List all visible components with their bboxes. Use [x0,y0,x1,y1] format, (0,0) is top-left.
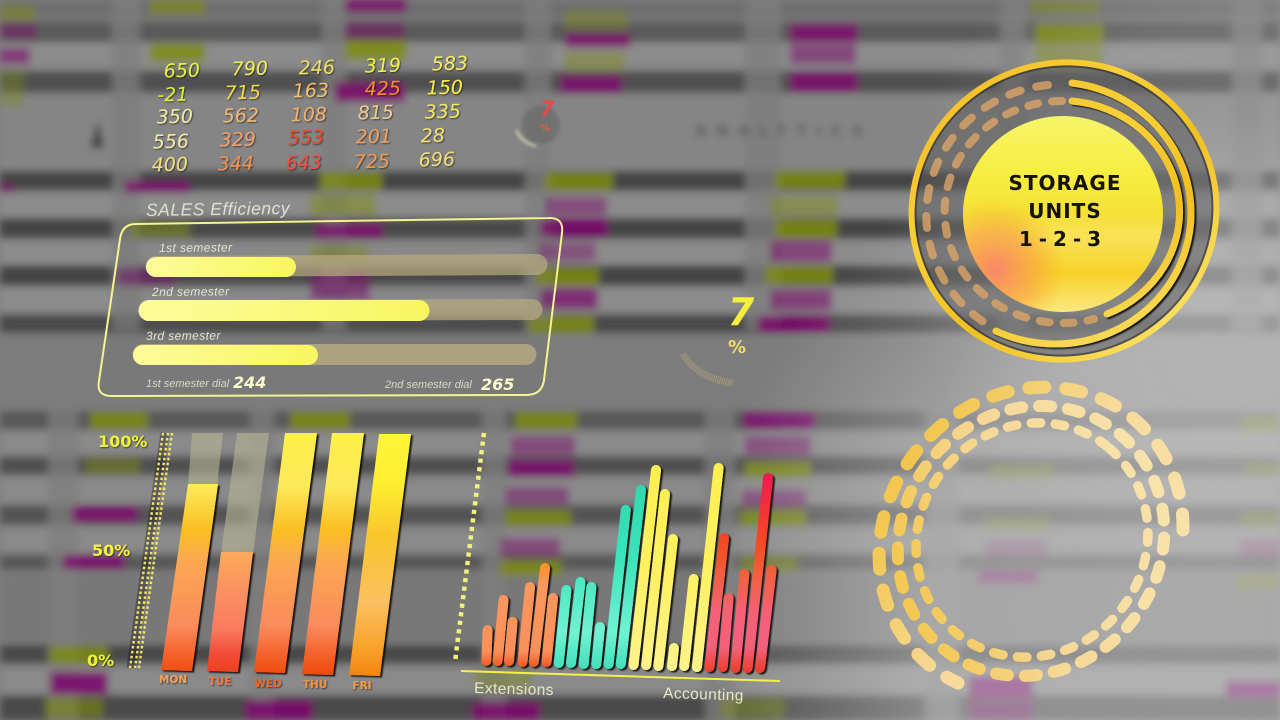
panel outline [99,218,562,396]
number grid: 400 [151,154,188,177]
weekday labels: FRI [352,680,372,692]
disc label: UNITS [1028,199,1102,223]
number grid: 28 [420,125,445,147]
bar: 2nd semester: 2nd semester [151,284,230,299]
number grid: -21 [157,84,189,106]
weekday labels [159,674,372,692]
bar: 3rd semester [132,328,536,365]
heading: sales efficiency: SALES Efficiency [146,198,291,220]
blurred figure icon [90,120,104,148]
bar chart: weekdays [87,432,411,692]
axis labels: 0% [87,651,114,670]
axis labels [87,432,147,670]
dashed arcs [926,85,1094,323]
dotted scale [130,433,172,668]
number grid: 425 [364,78,401,101]
bar: 3rd semester: 3rd semester [146,328,221,343]
weekday labels: MON [159,674,187,686]
disc label: STORAGE [1008,171,1122,195]
category labels: Accounting [663,685,744,705]
dial readouts: 265 [481,375,514,394]
middle dashed ring [843,352,1219,720]
dial readouts: 2nd semester dial [384,379,472,391]
small red dial: 7 [540,97,555,121]
number grid: 583 [431,53,468,76]
outer dashed ring [879,387,1183,683]
bar: 2nd semester [138,284,542,321]
number grid: 562 [222,105,259,128]
axis labels: 50% [92,541,130,560]
large 7 percent dial: 7 [728,290,755,334]
large 7 percent dial [683,290,755,383]
axis labels: 100% [98,432,147,451]
bar: 1st semester [146,240,548,277]
number grid: 335 [424,101,461,124]
number grid: 201 [355,126,392,149]
bar chart: extensions and accounting [455,433,780,705]
number grid: 163 [292,80,329,103]
storage units gauge [870,20,1258,402]
rounded bars [486,468,772,668]
number grid: 350 [156,106,193,129]
number grid: 725 [353,151,390,174]
number grid [151,53,468,177]
number grid: 643 [285,152,322,175]
number grid: 108 [290,104,327,127]
number grid: 696 [418,149,455,172]
dial readouts [146,373,514,394]
number grid: 246 [298,57,335,80]
small red dial [516,97,560,146]
lower table rows [0,411,1280,720]
disc label: 1 - 2 - 3 [1019,227,1101,251]
dashed ring gauge [843,352,1219,720]
number grid: 715 [224,82,261,105]
weekday bars [161,433,411,676]
blurred heading word: ANALYTICS [695,122,872,140]
solid arcs [996,83,1191,344]
disc label [1008,171,1122,251]
number grid: 553 [287,127,324,150]
category labels [474,680,744,705]
number grid: 556 [152,131,189,154]
background tracks [188,433,269,554]
large 7 percent dial: % [728,337,746,358]
number grid: 650 [163,60,200,83]
dial readouts: 1st semester dial [146,378,230,390]
number grid: 319 [364,55,401,78]
small red dial: % [540,123,550,134]
dotted axis [455,433,484,662]
baseline [461,671,780,681]
inner dashed ring [868,375,1196,705]
number grid: 815 [357,102,394,125]
center disc [963,116,1163,312]
number grid: 150 [426,77,463,100]
number grid: 344 [217,153,254,176]
number grid: 790 [231,58,268,81]
top table rows [0,0,1280,407]
number grid: 329 [219,129,256,152]
weekday labels: WED [254,678,282,690]
gauge backdrop [873,23,1255,399]
weekday labels: THU [303,679,327,691]
outer ring [870,20,1258,402]
bar: 1st semester: 1st semester [159,240,233,255]
dial readouts: 244 [233,373,266,392]
category labels: Extensions [474,680,554,699]
panel: sales efficiency [99,218,562,396]
weekday labels: TUE [209,676,231,688]
